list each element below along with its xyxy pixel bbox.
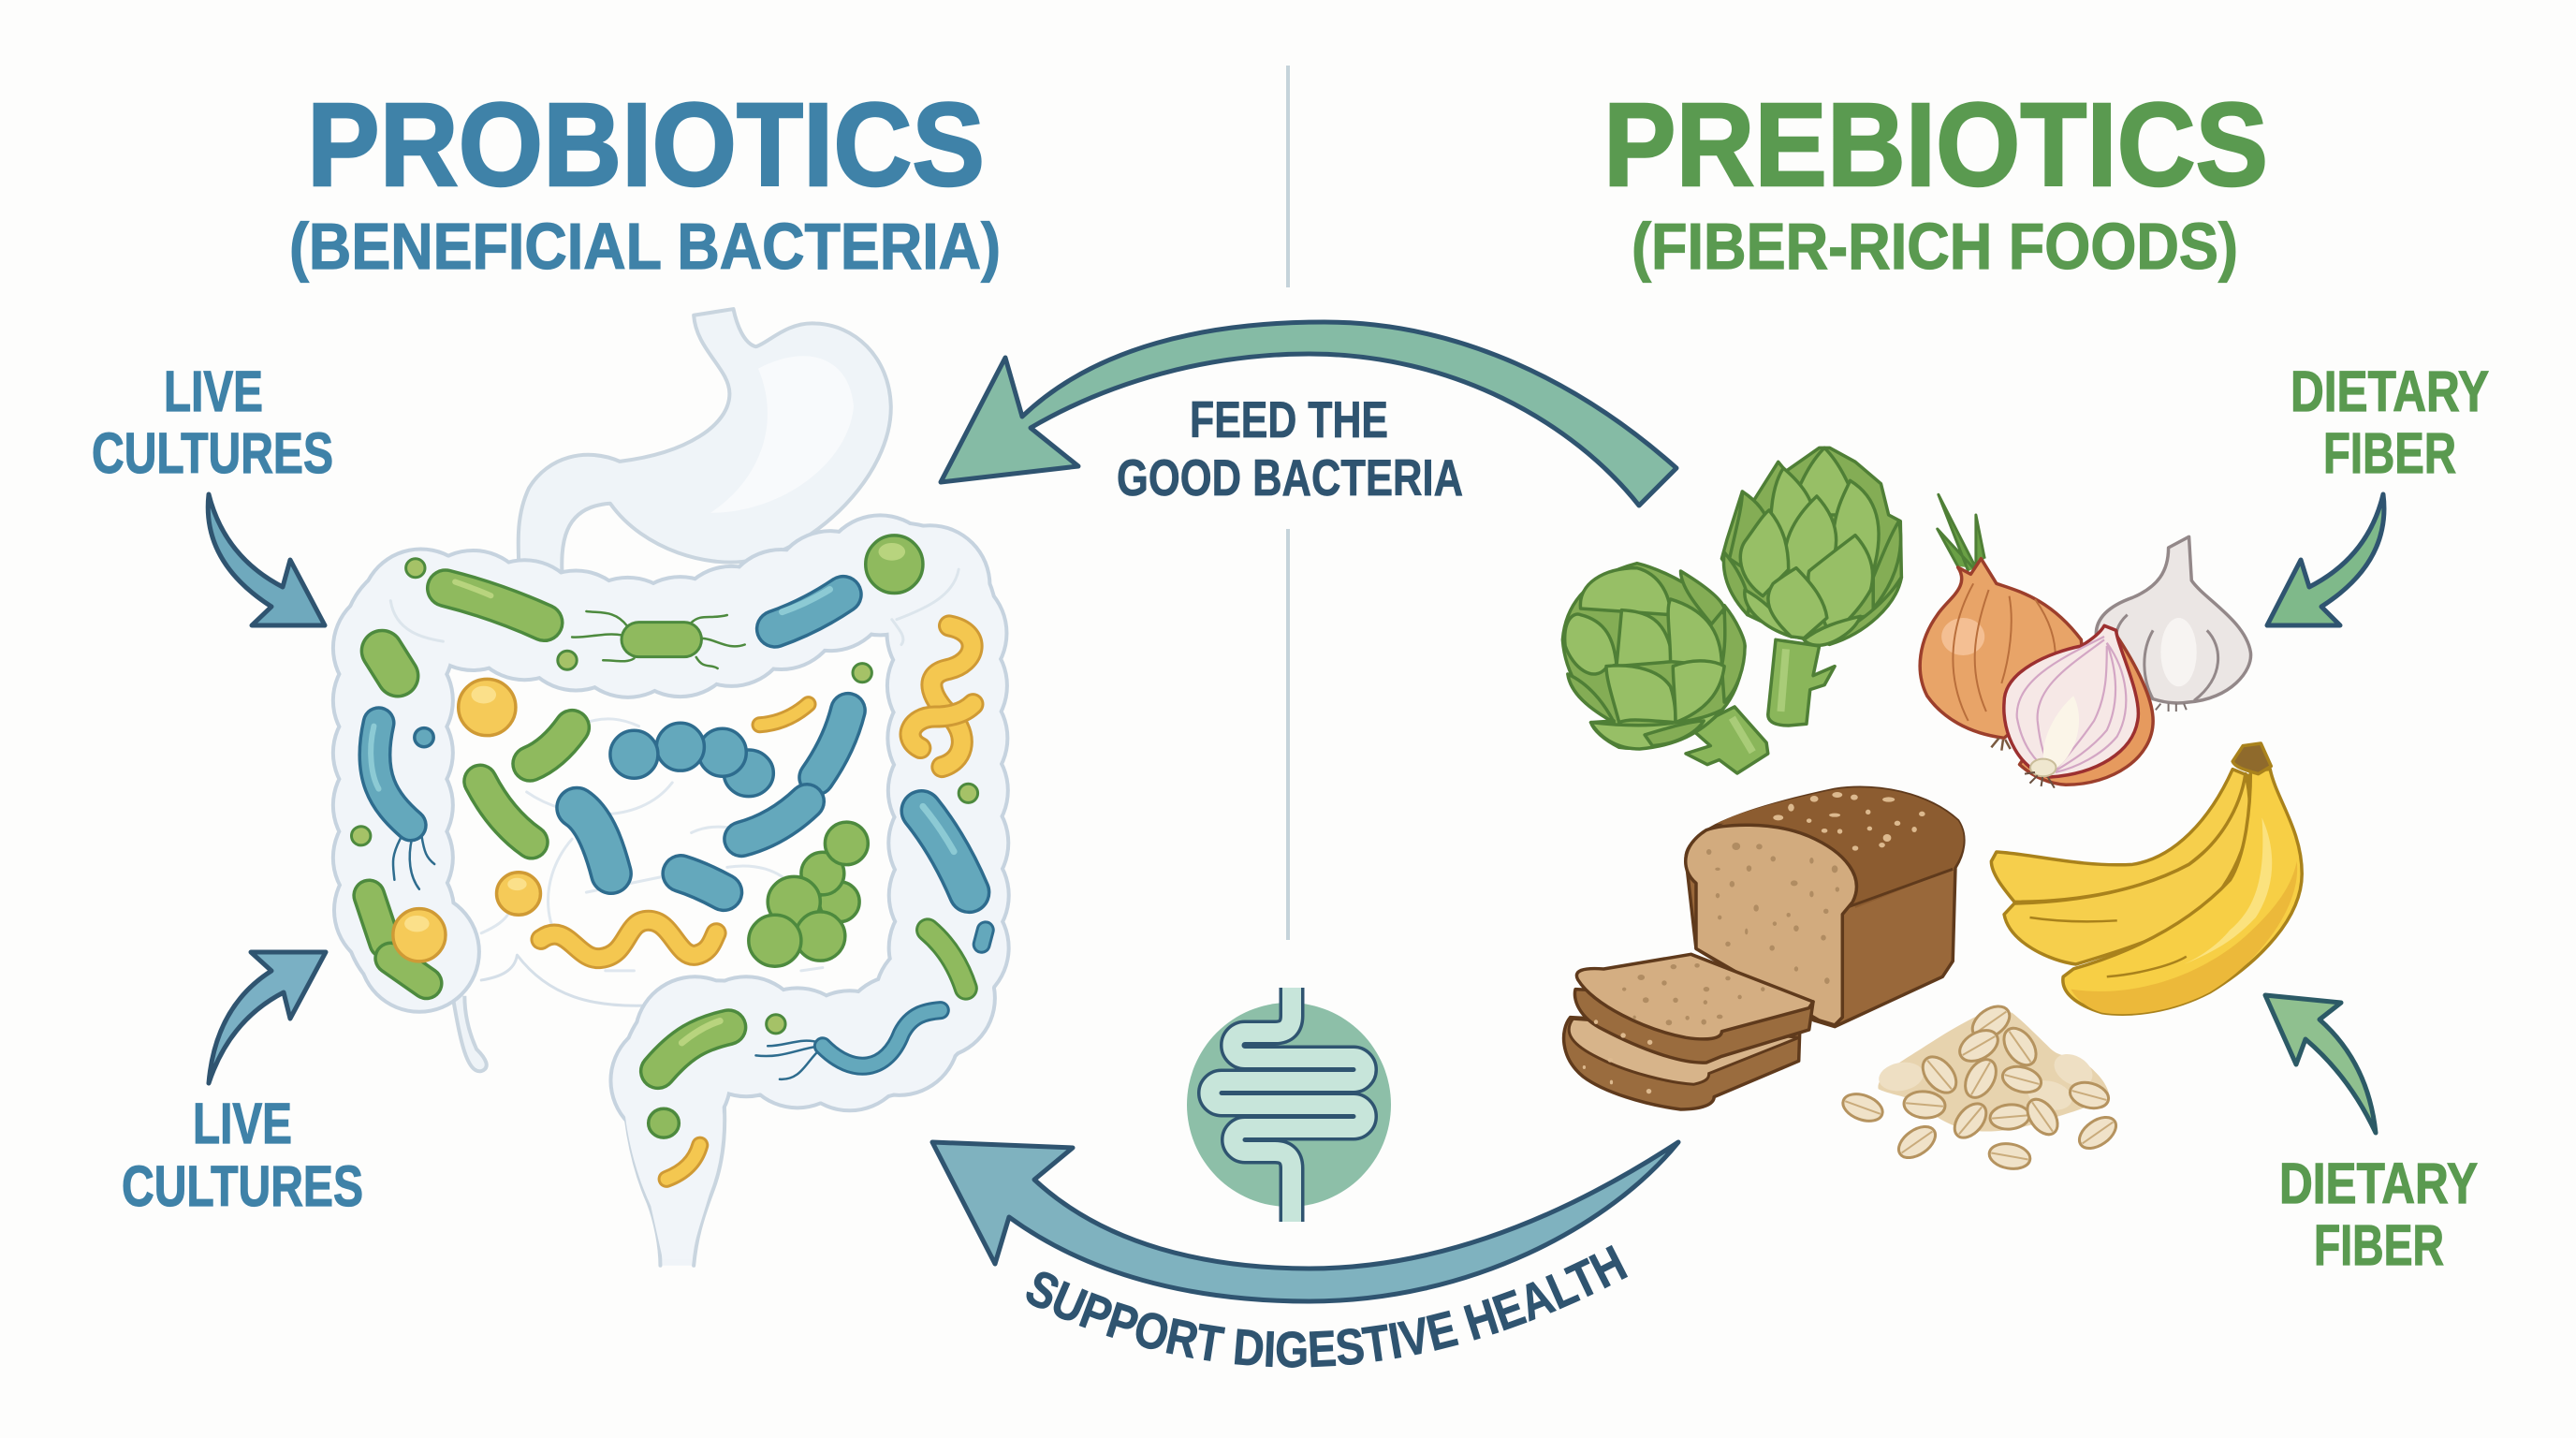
bacteria: green rod bottom xyxy=(658,1020,728,1071)
stomach xyxy=(519,309,891,582)
bacteria: blue rod top xyxy=(775,590,843,629)
title: probiotics: PROBIOTICS xyxy=(307,79,985,211)
bacteria: green rod lower right xyxy=(928,930,966,989)
bacteria: small green dot xyxy=(767,1015,785,1034)
bacteria: blue rod centre xyxy=(577,808,611,873)
bacteria: teal bean xyxy=(681,873,724,892)
bacteria: green rod centre xyxy=(480,782,532,843)
arrow: dietary fiber top xyxy=(2267,494,2384,625)
icon: intestine in circle xyxy=(1187,988,1391,1222)
bacteria: green flagellated xyxy=(572,611,745,668)
bacteria: small teal rod xyxy=(982,930,986,945)
panel: digestive tract with bacteria xyxy=(351,309,986,1266)
label: live cultures top: LIVE xyxy=(164,360,263,423)
bacteria: teal rods joined xyxy=(741,711,848,839)
bacteria: green cluster xyxy=(749,822,868,966)
arrow: feed the good bacteria xyxy=(941,322,1676,506)
subtitle: beneficial bacteria: (BENEFICIAL BACTERIA) xyxy=(289,210,1001,283)
arrow: support digestive health xyxy=(932,1142,1678,1301)
bacteria: yellow coccus xyxy=(459,679,516,736)
bacteria: yellow spirochete xyxy=(541,920,716,959)
label: feed the good bacteria: FEED THE xyxy=(1190,390,1388,448)
bacteria: blue rod right xyxy=(921,806,969,892)
bacteria: green rod top xyxy=(446,582,545,623)
bacteria: blue chain xyxy=(610,723,773,797)
label: live cultures top: CULTURES xyxy=(92,421,333,485)
bacteria: small yellow rod rectum xyxy=(666,1145,700,1179)
bread slices xyxy=(1564,954,1813,1109)
bacteria: large green coccus xyxy=(866,536,923,594)
label: dietary fiber bottom: DIETARY xyxy=(2279,1152,2478,1215)
label: support digestive health: SUPPORT DIGESTIVE HEALTH xyxy=(1026,1245,1629,1368)
label: live cultures bottom: CULTURES xyxy=(122,1154,363,1218)
oat mound xyxy=(1878,1009,2110,1132)
bacteria: short green rod xyxy=(382,651,398,676)
oats xyxy=(1839,1000,2121,1172)
arrow: live cultures bottom xyxy=(209,952,326,1083)
artichoke left xyxy=(1562,564,1768,773)
red onion half xyxy=(2004,625,2153,788)
bread loaf xyxy=(1686,787,1964,1027)
panel: bread, banana and oats xyxy=(1564,743,2302,1132)
bacteria: small blue dot xyxy=(415,728,433,747)
title: prebiotics: PREBIOTICS xyxy=(1603,79,2268,211)
bacteria: blue spirillum xyxy=(755,1010,941,1079)
artichoke right xyxy=(1721,448,1901,726)
arrow: live cultures top xyxy=(208,494,325,625)
bacteria: small yellow rod xyxy=(760,704,809,725)
label: dietary fiber top: DIETARY xyxy=(2291,360,2489,423)
bacteria: small green dot xyxy=(853,664,871,682)
panel: artichokes, onions and garlic xyxy=(1562,448,2251,788)
rectum xyxy=(623,1052,724,1266)
bacteria: yellow worm right xyxy=(911,625,973,767)
bacteria: small green dot xyxy=(406,559,425,578)
label: feed the good bacteria: GOOD BACTERIA xyxy=(1117,448,1463,506)
label: dietary fiber bottom: FIBER xyxy=(2314,1213,2444,1277)
bacteria: green chain with yellow coccus xyxy=(369,895,446,983)
bacteria: green bean xyxy=(530,727,572,764)
appendix xyxy=(453,996,487,1071)
bacteria: flagellated teal rod xyxy=(371,723,434,889)
bananas xyxy=(1991,743,2302,1014)
small intestine outlines xyxy=(481,719,823,1005)
colon xyxy=(390,569,959,1259)
bacteria: small green dot xyxy=(558,651,577,669)
onion xyxy=(1920,494,2084,751)
bacteria: small green dot xyxy=(351,827,371,845)
bacteria: yellow coccus small xyxy=(497,873,540,915)
bacteria: small green dot xyxy=(959,784,978,802)
label: live cultures bottom: LIVE xyxy=(193,1092,292,1155)
arrow: dietary fiber bottom xyxy=(2265,995,2376,1133)
subtitle: fiber-rich foods: (FIBER-RICH FOODS) xyxy=(1632,210,2238,283)
label: dietary fiber top: FIBER xyxy=(2323,421,2456,485)
bacteria: small green coccus rectum xyxy=(649,1108,679,1137)
garlic xyxy=(2096,536,2251,712)
